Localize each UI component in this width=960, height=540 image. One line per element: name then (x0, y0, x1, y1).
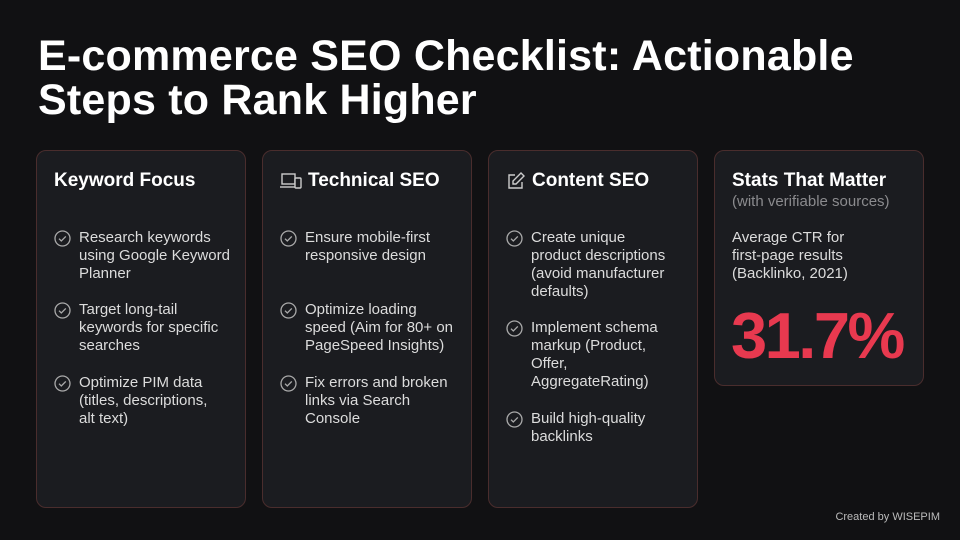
heading: keyword focus: Keyword Focus (54, 170, 195, 191)
item: PIM data: alt text) (79, 410, 128, 427)
item: loading speed: Optimize loading speed (Aim for 80+ on PageSpeed Insights) (305, 301, 453, 354)
item: unique descriptions: product descriptions (avoid manufacturer defaults) (531, 247, 665, 300)
item: backlinks: Build high-quality backlinks (531, 410, 645, 445)
title: Steps to Rank Higher (38, 76, 477, 124)
item: research keywords: Research keywords using Google Keyword Planner (79, 229, 230, 282)
heading: content seo: Content SEO (532, 170, 649, 191)
footer credit: Created by WISEPIM (835, 511, 940, 523)
stat description: (Backlinko, 2021) (732, 265, 848, 282)
stat description: first-page results (732, 247, 843, 264)
subheading: (with verifiable sources) (732, 193, 890, 210)
heading: technical seo: Technical SEO (308, 170, 440, 191)
panel: keyword focus (36, 150, 246, 508)
item: unique descriptions: Create unique (531, 229, 625, 246)
item: PIM data: Optimize PIM data (79, 374, 202, 391)
heading: stats: Stats That Matter (732, 170, 886, 191)
item: fix errors: Fix errors and broken links via Search Console (305, 374, 448, 427)
item: long-tail: Target long-tail keywords for specific searches (79, 301, 218, 354)
title: E-commerce SEO Checklist: Actionable (38, 32, 854, 80)
title (38, 32, 854, 124)
panel: stats (714, 150, 924, 386)
item: PIM data (54, 374, 207, 427)
item: PIM data: (titles, descriptions, (79, 392, 207, 409)
item: mobile-first: Ensure mobile-first responsive design (305, 229, 430, 264)
item: schema markup: Implement schema markup (Product, Offer, AggregateRating) (531, 319, 658, 390)
item: unique descriptions (506, 229, 665, 300)
panel: content seo (488, 150, 698, 508)
stat description (732, 229, 848, 282)
panel: technical seo (262, 150, 472, 508)
big stat number: 31.7% (731, 299, 903, 372)
stat description: Average CTR for (732, 229, 844, 246)
